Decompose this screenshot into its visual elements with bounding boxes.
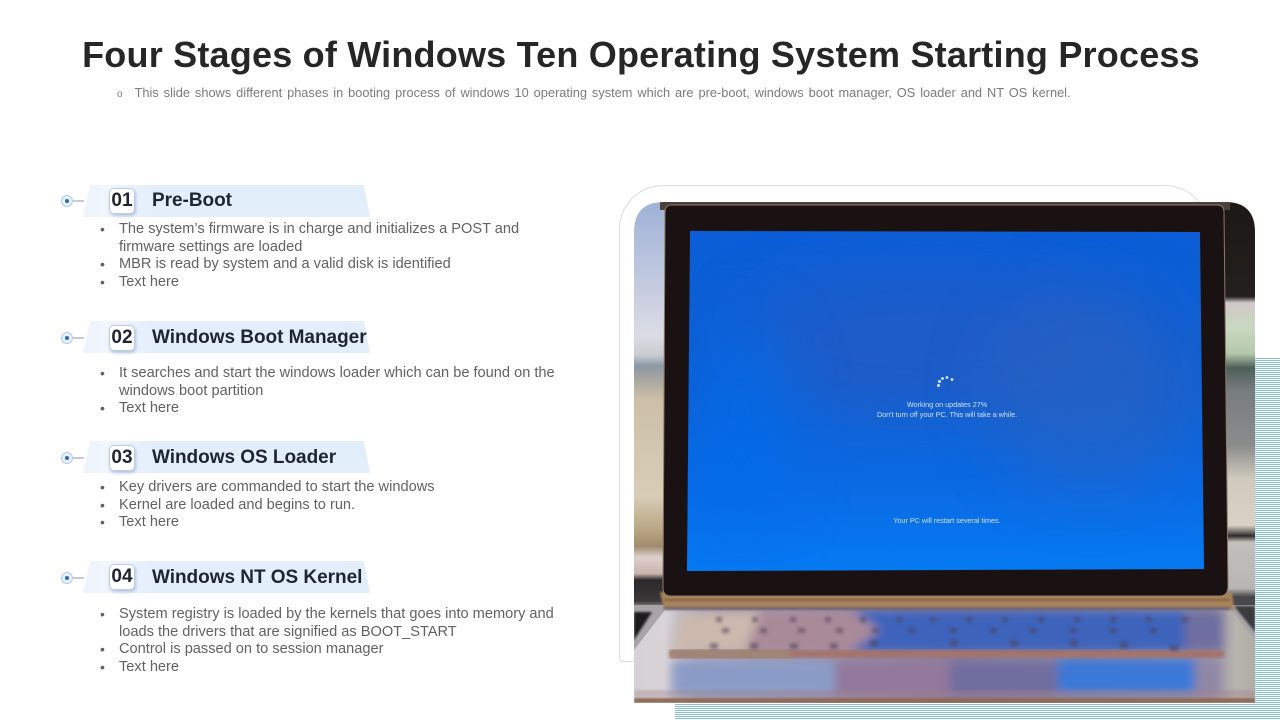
stage 2 banner [83,321,370,353]
stage 2 number [109,325,135,351]
stage 1 heading: Pre-Boot [152,190,232,211]
stage 1 bullets: The system’s firmware is in charge and initializes a POST and [119,221,519,237]
stage 4 bullets: Text here [119,659,179,675]
stage 4 bullets [100,606,554,675]
decorative striped block: right [1255,358,1280,720]
subtitle: o This slide shows different phases in booting process of windows 10 operating system which are pre-boot, windows boot manager, OS loader and NT OS kernel. [117,85,1071,100]
stage 2: Windows Boot Manager [61,321,555,416]
stage 3 bullets: • [100,479,105,495]
update spinner [937,376,953,387]
stage 3 bullets [100,479,435,530]
stage 4 number: 04 [111,566,133,587]
stage 3: Windows OS Loader [61,441,435,530]
stage 1 bullets: • [100,256,105,272]
image outline frame [619,185,1209,662]
decorative striped block: bottom [675,704,1280,720]
stage 4 bullets: Control is passed on to session manager [119,641,383,657]
stage 3 bullets: Kernel are loaded and begins to run. [119,497,355,513]
stage 3 bullets: Key drivers are commanded to start the windows [119,479,435,495]
stage 1 bullets: MBR is read by system and a valid disk is identified [119,256,451,272]
stage 3 heading: Windows OS Loader [152,447,336,468]
stage 1 number: 01 [111,190,133,211]
stage 4 bullets: • [100,606,105,622]
stage 4 heading: Windows NT OS Kernel [152,567,362,588]
stage 1 bullets: Text here [119,274,179,290]
stage 1: Pre-Boot [61,185,519,290]
stage 1 number [109,188,135,214]
stage 2 bullets: It searches and start the windows loader which can be found on the [119,365,555,381]
screen text: Don't turn off your PC. This will take a while. [877,410,1017,419]
screen text [877,400,1017,525]
stage 4 bullets: • [100,659,105,675]
stage 1 bullets [100,221,519,290]
title: Four Stages of Windows Ten Operating System Starting Process [82,34,1200,75]
stage 1 banner [83,185,370,217]
stage 2 bullets: • [100,365,105,381]
stage 2 bullets: windows boot partition [119,383,263,399]
laptop keyboard deck [634,606,1255,703]
stage 3 bullets: Text here [119,514,179,530]
stage 1 marker icon [61,195,84,207]
screen text: Your PC will restart several times. [893,516,1001,525]
keys [710,617,1188,651]
stage 2 number: 02 [111,327,133,348]
laptop screen [687,231,1204,571]
stage 4 bullets: System registry is loaded by the kernels that goes into memory and [119,606,554,622]
keyboard colour reflections [845,610,1220,652]
stage 3 bullets: • [100,514,105,530]
stage 1 bullets: • [100,221,105,237]
stage 4 bullets: • [100,641,105,657]
stage 4 banner [83,561,370,593]
stage 1 bullets: • [100,274,105,290]
stage 2 bullets: • [100,400,105,416]
stage 4 number [109,564,135,590]
photo: laptop showing Windows update screen [634,202,1255,703]
stage 2 heading: Windows Boot Manager [152,327,367,348]
stage 3 number: 03 [111,447,133,468]
stage 3 banner [83,441,370,473]
stage 2 marker icon [61,332,84,344]
stage 4 marker icon [61,572,84,584]
background scenery [634,202,1255,650]
stage 3 bullets: • [100,497,105,513]
stage 1 bullets: firmware settings are loaded [119,239,302,255]
screen text: Working on updates 27% [907,400,988,409]
stage 3 marker icon [61,452,84,464]
laptop hinge [660,592,1234,610]
stage 2 bullets: Text here [119,400,179,416]
stage 2 bullets [100,365,555,416]
stage 4 bullets: loads the drivers that are signified as BOOT_START [119,624,457,640]
laptop bezel [663,205,1228,596]
stage 3 number [109,445,135,471]
stage 4: Windows NT OS Kernel [61,561,554,675]
